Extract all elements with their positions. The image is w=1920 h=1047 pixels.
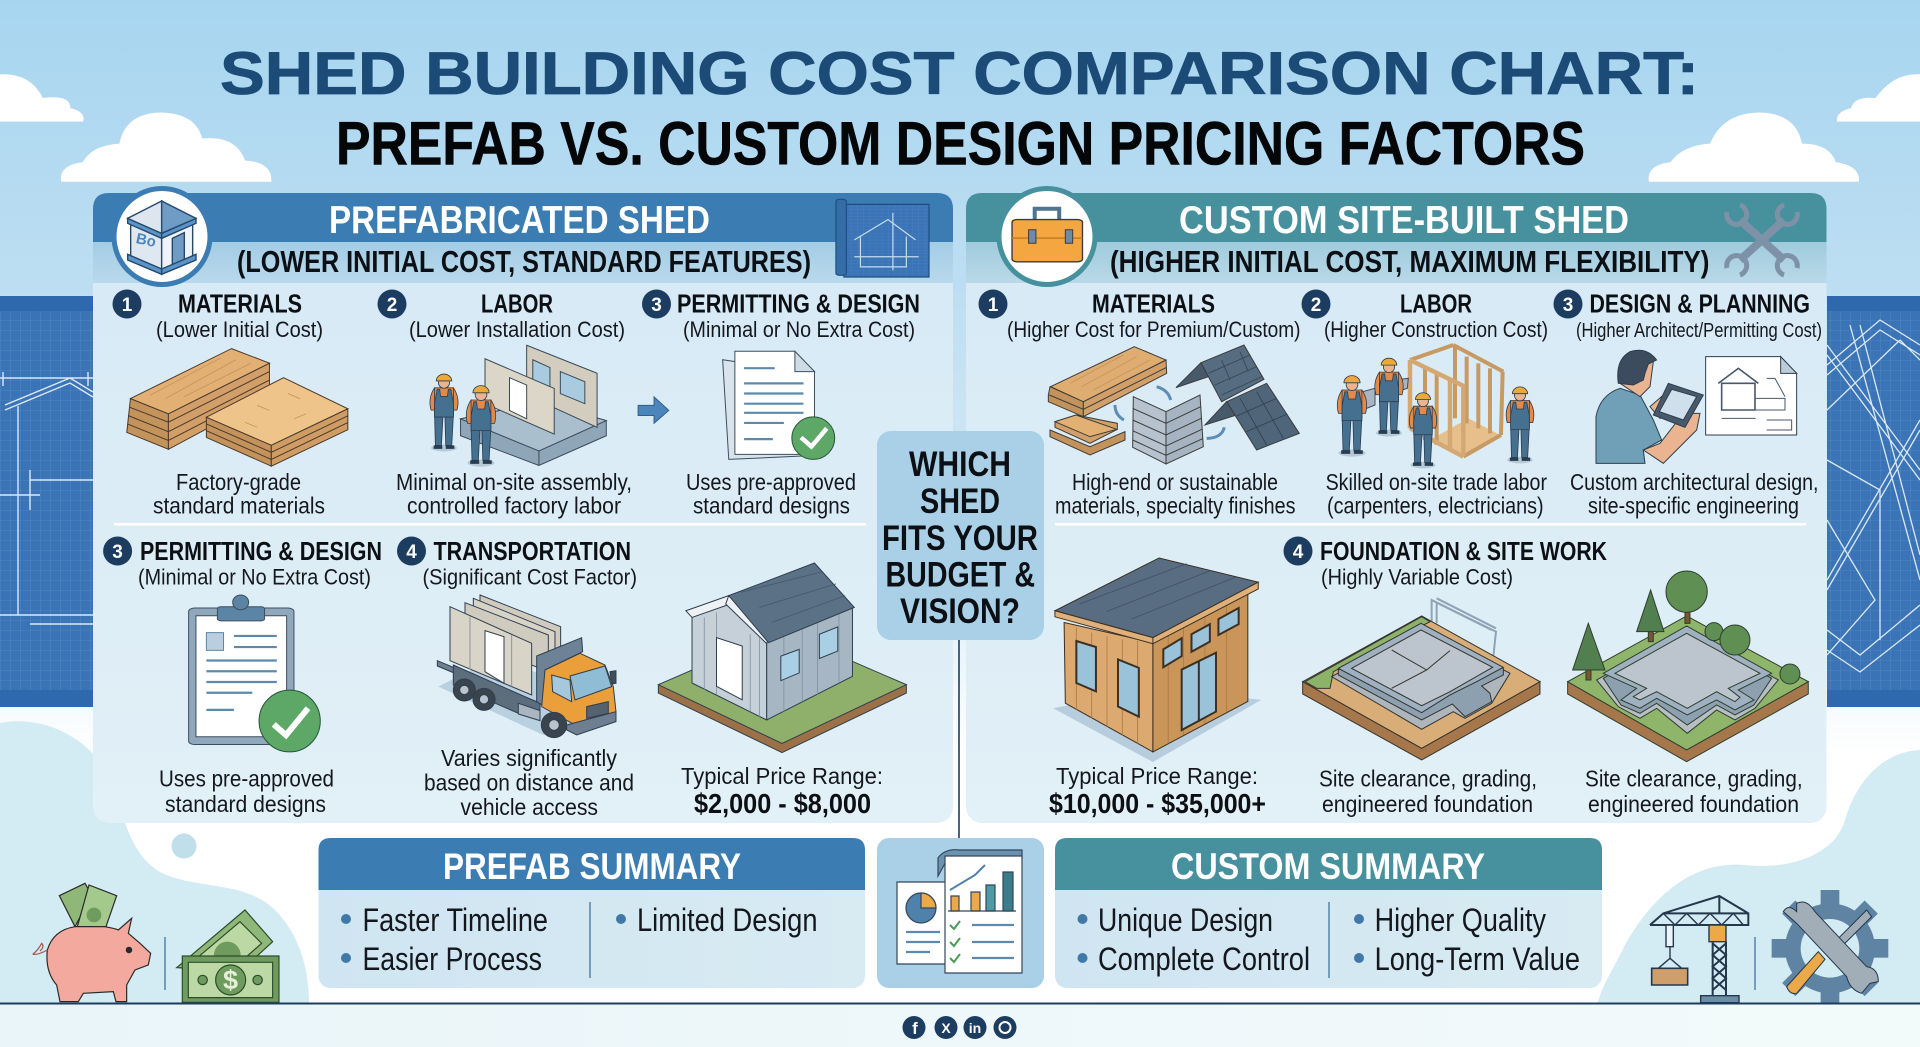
panel: prefabricated shed <box>93 188 953 823</box>
factor 4 foundation and site work: 4 <box>1293 542 1304 563</box>
factor 2 labor: 2 <box>387 295 397 316</box>
factor 1 materials: Factory-grade <box>176 469 301 495</box>
social icons: in <box>969 1020 981 1036</box>
factor 1 materials: standard materials <box>153 492 325 518</box>
factor 2 labor <box>378 288 632 518</box>
header band <box>93 193 953 242</box>
panel body <box>93 193 953 823</box>
clouds <box>0 74 1920 182</box>
factor 3 permitting and design: PERMITTING & DESIGN <box>677 288 920 318</box>
header band <box>966 193 1826 242</box>
icon: delivery truck <box>437 595 617 738</box>
small decorative bubble <box>172 834 196 858</box>
icon: crossed wrenches <box>1727 205 1797 275</box>
icon: clipboard with check <box>189 595 320 752</box>
factor 3 permitting second row: PERMITTING & DESIGN <box>140 536 382 566</box>
panel body <box>966 193 1826 823</box>
centre vertical divider <box>958 640 960 838</box>
icon: premium materials <box>1048 345 1299 464</box>
heading: CUSTOM SITE-BUILT SHED <box>1179 199 1629 242</box>
icon: approved document <box>723 351 835 459</box>
factor 2 labor: LABOR <box>481 288 553 318</box>
summary list <box>341 902 818 978</box>
callout: which shed: SHED <box>920 482 1000 521</box>
panel: custom summary: CUSTOM SUMMARY <box>1171 846 1485 887</box>
bottom right blob <box>1598 750 1920 1003</box>
icon: foundation on dirt <box>1303 598 1540 760</box>
right blueprint band <box>1827 296 1920 707</box>
factor 4 foundation and site work: Site clearance, grading, <box>1319 766 1537 792</box>
factor 4 transportation <box>397 536 637 820</box>
panel: prefab summary <box>318 838 865 988</box>
factor 3 permitting and design <box>642 288 920 518</box>
callout: which shed: VISION? <box>900 592 1020 631</box>
icon: panel assembly with workers <box>430 345 606 467</box>
factor 1 materials: High-end or sustainable <box>1072 469 1278 495</box>
summary list: Unique Design <box>1098 902 1273 938</box>
icon: landscaped foundation <box>1568 571 1808 762</box>
icon: gear with tools <box>1772 890 1888 1003</box>
summary list: Faster Timeline <box>362 902 548 938</box>
factor 3 permitting second row <box>103 536 382 817</box>
icon: piggy bank <box>33 883 151 1002</box>
factor 2 labor: Minimal on-site assembly, <box>396 469 632 495</box>
factor 1 materials: materials, specialty finishes <box>1055 492 1296 518</box>
social icons: X <box>941 1020 951 1036</box>
summary list <box>1078 902 1580 978</box>
factor 1 materials: MATERIALS <box>1092 288 1215 318</box>
subheader band <box>93 242 953 283</box>
factor 1 materials: MATERIALS <box>178 288 302 318</box>
factor 2 labor: controlled factory labor <box>407 492 621 518</box>
footer baseline <box>0 1004 1920 1047</box>
icon: lumber stacks <box>127 349 348 466</box>
factor 1 materials <box>112 288 348 518</box>
site foundation with landscaping: engineered foundation <box>1588 791 1799 817</box>
icon: prefab building badge: Bo <box>134 230 157 251</box>
left blueprint band <box>0 296 93 707</box>
panel: custom summary <box>1055 838 1602 988</box>
factor 3 permitting second row: standard designs <box>165 791 326 817</box>
factor 3 design and planning <box>1554 288 1822 518</box>
summary list: Limited Design <box>637 902 818 938</box>
summary list: Higher Quality <box>1375 902 1546 938</box>
icon: toolbox badge <box>999 188 1095 284</box>
factor 3 design and planning: 3 <box>1563 295 1573 316</box>
icon: prefab building badge <box>114 188 210 284</box>
factor 3 design and planning: Custom architectural design, <box>1570 469 1818 495</box>
factor 4 transportation: Varies significantly <box>441 745 617 771</box>
factor 4 foundation and site work: engineered foundation <box>1322 791 1533 817</box>
factor 4 transportation: based on distance and <box>424 770 634 796</box>
factor 3 permitting second row: Uses pre-approved <box>159 766 334 792</box>
factor 2 labor <box>1302 288 1548 518</box>
icon: designer with tablet and plan <box>1596 350 1797 463</box>
subheader band <box>966 242 1826 283</box>
custom shed and price: $10,000 - $35,000+ <box>1049 788 1266 819</box>
factor 2 labor: Skilled on-site trade labor <box>1326 469 1547 495</box>
factor 3 design and planning: DESIGN & PLANNING <box>1590 288 1810 318</box>
subheading: (HIGHER INITIAL COST, MAXIMUM FLEXIBILITY) <box>1110 244 1710 279</box>
icon: crane <box>1650 896 1748 1003</box>
prefab shed and price: Typical Price Range: <box>681 763 883 789</box>
factor 1 materials <box>978 288 1300 518</box>
factor 4 transportation: vehicle access <box>460 794 598 820</box>
icon: custom shed <box>1053 558 1261 762</box>
factor 2 labor: (carpenters, electricians) <box>1327 492 1544 518</box>
heading: PREFABRICATED SHED <box>329 199 710 242</box>
icon: prefab shed <box>658 563 906 753</box>
factor 3 design and planning: site-specific engineering <box>1588 492 1799 518</box>
panel: report icon <box>877 838 1044 988</box>
factor 3 permitting and design: 3 <box>651 295 662 316</box>
panel: prefab summary: PREFAB SUMMARY <box>443 846 741 887</box>
factor 2 labor: (Higher Construction Cost) <box>1324 317 1548 342</box>
factor 3 permitting and design: standard designs <box>693 492 850 518</box>
summary list: Easier Process <box>362 941 542 977</box>
factor 3 permitting second row: (Minimal or No Extra Cost) <box>138 564 371 590</box>
bottom left blob <box>0 721 309 1003</box>
site foundation with landscaping <box>1568 571 1808 817</box>
summary header <box>1055 838 1602 890</box>
icon: cash stack <box>177 910 279 1002</box>
callout: which shed: BUDGET & <box>886 556 1035 594</box>
callout: which shed: FITS YOUR <box>882 519 1038 558</box>
factor 3 permitting and design: (Minimal or No Extra Cost) <box>683 317 915 342</box>
factor 4 foundation and site work <box>1284 536 1607 817</box>
summary list: Complete Control <box>1098 941 1310 977</box>
factor 2 labor: (Lower Installation Cost) <box>409 317 625 342</box>
factor 4 foundation and site work: (Highly Variable Cost) <box>1321 564 1513 590</box>
factor 1 materials: 1 <box>988 295 999 316</box>
factor 3 permitting and design: Uses pre-approved <box>686 469 856 495</box>
title line 2: PREFAB VS. CUSTOM DESIGN PRICING FACTORS <box>336 110 1585 178</box>
callout: which shed: WHICH <box>909 445 1011 484</box>
factor 4 transportation: TRANSPORTATION <box>434 536 631 566</box>
prefab shed and price <box>658 563 906 819</box>
icon: framing crew <box>1337 345 1534 468</box>
icon: blueprint roll <box>836 199 929 277</box>
icon: report with charts <box>897 850 1022 973</box>
site foundation with landscaping: Site clearance, grading, <box>1585 766 1803 792</box>
custom shed and price <box>1049 558 1266 819</box>
panel: custom site-built shed <box>966 188 1826 823</box>
summary header <box>318 838 865 890</box>
subheading: (LOWER INITIAL COST, STANDARD FEATURES) <box>237 244 811 279</box>
custom shed and price: Typical Price Range: <box>1056 763 1258 789</box>
factor 1 materials: (Higher Cost for Premium/Custom) <box>1007 317 1300 342</box>
factor 4 foundation and site work: FOUNDATION & SITE WORK <box>1320 536 1607 566</box>
factor 3 design and planning: (Higher Architect/Permitting Cost) <box>1576 319 1822 342</box>
factor 2 labor: LABOR <box>1400 288 1472 318</box>
crane divider <box>1754 937 1756 990</box>
title line 1: SHED BUILDING COST COMPARISON CHART: <box>220 40 1699 107</box>
factor 4 transportation: (Significant Cost Factor) <box>422 564 637 590</box>
factor 3 permitting second row: 3 <box>112 542 123 563</box>
prefab shed and price: $2,000 - $8,000 <box>694 788 871 819</box>
factor 1 materials: (Lower Initial Cost) <box>156 317 323 342</box>
social icons <box>902 1016 1016 1039</box>
arrow <box>638 397 669 423</box>
dollar sign: $ <box>223 965 238 995</box>
title <box>220 40 1699 178</box>
factor 4 transportation: 4 <box>406 542 417 563</box>
social icons: f <box>912 1019 918 1038</box>
callout: which shed <box>877 431 1044 640</box>
summary list: Long-Term Value <box>1375 941 1580 977</box>
factor 1 materials: 1 <box>122 295 133 316</box>
cash divider <box>164 937 166 990</box>
factor 2 labor: 2 <box>1311 295 1321 316</box>
